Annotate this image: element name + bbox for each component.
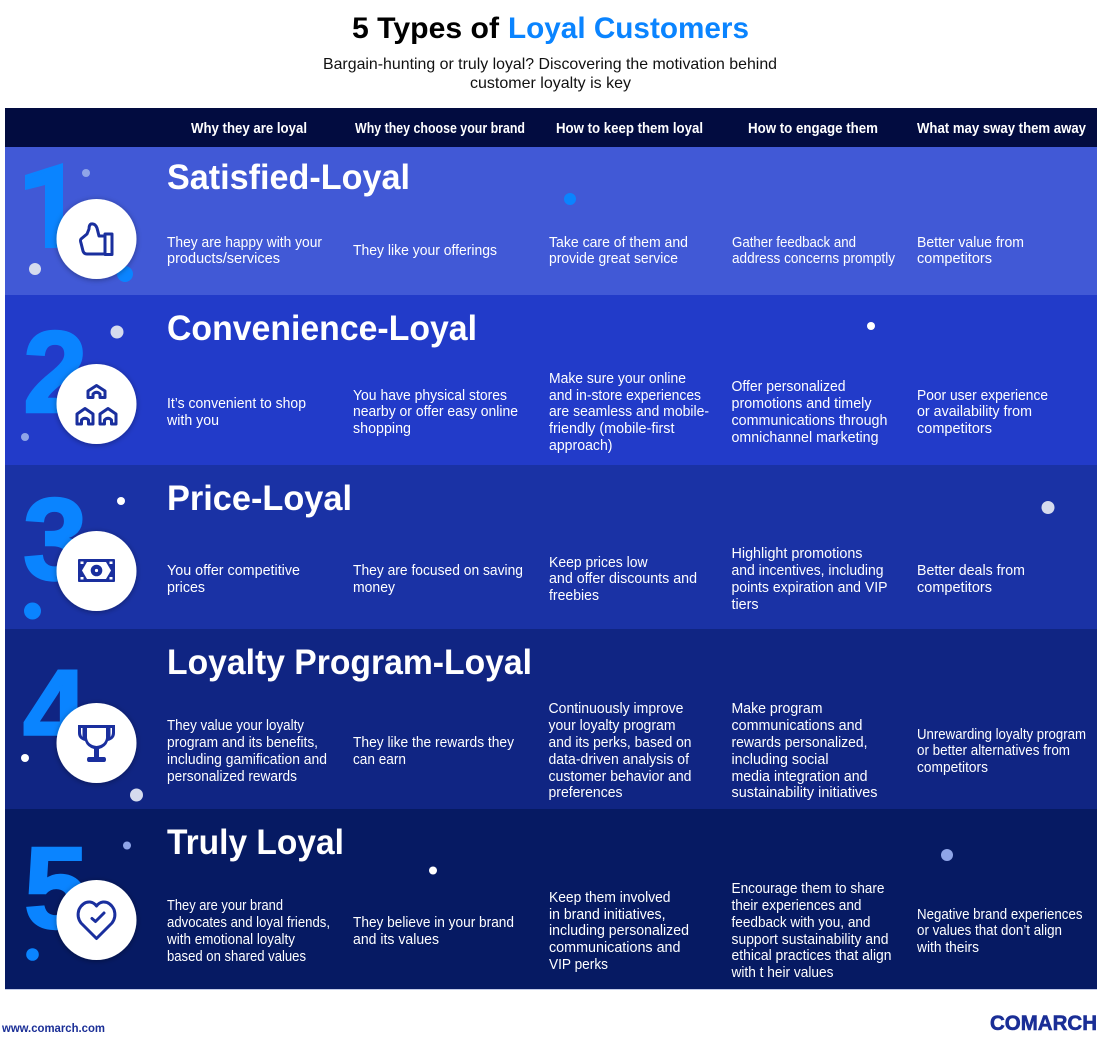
text: why choose: They are focused on saving <box>353 563 523 579</box>
text: why loyal: with emotional loyalty <box>166 932 296 948</box>
panel: Satisfied-Loyal <box>5 143 1097 295</box>
text: keep loyal: VIP perks <box>549 957 608 973</box>
text: engage <box>732 235 896 267</box>
table header: What may sway them away <box>917 121 1086 137</box>
number 1: 1 <box>20 143 85 273</box>
panel: Convenience-Loyal <box>5 295 1097 465</box>
text: engage: Gather feedback and <box>732 235 856 251</box>
logo: Comarch: COMARCH <box>990 1012 1097 1035</box>
text: engage: Make program <box>732 701 822 717</box>
text: why loyal: personalized rewards <box>167 769 297 785</box>
text: why loyal: with you <box>166 413 219 429</box>
text: keep loyal: Continuously improve <box>548 701 684 717</box>
text: sway: Unrewarding loyalty program <box>917 727 1086 743</box>
number 1 <box>25 163 63 248</box>
text: why loyal <box>166 396 306 429</box>
text: keep loyal <box>549 371 709 454</box>
text: engage: media integration and <box>732 769 868 785</box>
text: keep loyal: friendly (mobile-first <box>549 421 674 437</box>
text: why choose <box>353 735 515 768</box>
text: engage <box>732 701 878 801</box>
text: sway: Negative brand experiences <box>917 907 1082 923</box>
text: engage <box>732 379 888 446</box>
text: keep loyal: approach) <box>549 438 612 454</box>
heading: Convenience-Loyal <box>167 308 477 348</box>
text: keep loyal <box>549 890 689 973</box>
footer url: www.comarch.com <box>1 1021 105 1035</box>
text: sway: Poor user experience <box>917 388 1048 404</box>
text: keep loyal: preferences <box>548 785 622 801</box>
subtitle: Bargain-hunting or truly loyal? Discovering the motivation behind <box>323 56 777 73</box>
panel: Loyalty Program-Loyal <box>5 629 1097 809</box>
text: sway <box>917 388 1048 437</box>
text: why loyal: They are happy with your <box>167 235 322 251</box>
text: keep loyal: communications and <box>549 940 680 956</box>
heading: Truly Loyal <box>167 822 344 862</box>
heading: Loyalty Program-Loyal <box>167 642 532 682</box>
text: why choose: and its values <box>353 932 439 948</box>
text: keep loyal: Keep prices low <box>549 555 648 571</box>
text: sway <box>917 563 1025 596</box>
text: keep loyal: Keep them involved <box>549 890 670 906</box>
panel: Truly Loyal <box>5 809 1097 990</box>
heading: Price-Loyal <box>167 478 352 518</box>
table header: Why they choose your brand <box>355 121 525 137</box>
number 2: 2 <box>23 307 88 437</box>
number 4: 4 <box>23 646 88 776</box>
text: why choose: nearby or offer easy online <box>353 404 518 420</box>
text: why loyal <box>167 718 327 785</box>
text: sway <box>917 235 1024 267</box>
text: engage: omnichannel marketing <box>732 430 878 446</box>
text: why choose: They like the rewards they <box>353 735 515 751</box>
heading: Satisfied-Loyal <box>167 157 410 197</box>
text: sway: competitors <box>917 760 988 776</box>
table header <box>5 108 1097 147</box>
text: why choose: They like your offerings <box>353 243 497 259</box>
panel: Price-Loyal <box>5 465 1097 629</box>
title: Loyal Customers <box>508 12 749 45</box>
text: engage: including social <box>732 752 828 768</box>
text: why loyal: products/services <box>167 251 280 267</box>
text: sway: competitors <box>917 421 992 437</box>
text: why choose <box>353 563 523 596</box>
text: sway: competitors <box>917 580 992 596</box>
number 3: 3 <box>23 474 88 604</box>
text: keep loyal: are seamless and mobile- <box>549 404 709 420</box>
text: engage <box>732 546 888 613</box>
text: engage <box>731 881 892 981</box>
table header: Why they are loyal <box>191 121 307 137</box>
text: why loyal: including gamification and <box>167 752 327 768</box>
table header: How to keep them loyal <box>556 121 703 137</box>
text: why choose: You have physical stores <box>353 388 507 404</box>
text: why choose: money <box>353 580 396 596</box>
text: sway: with theirs <box>916 940 979 956</box>
text: engage: ethical practices that align <box>732 948 892 964</box>
text: sway: Better deals from <box>917 563 1025 579</box>
text: engage: and incentives, including <box>732 563 884 579</box>
text: engage: with t heir values <box>731 965 834 981</box>
text: why choose <box>353 915 514 948</box>
text: why loyal <box>166 898 330 965</box>
text: engage: communications and <box>732 718 862 734</box>
number 5: 5 <box>24 823 89 953</box>
text: engage: their experiences and <box>732 898 862 914</box>
text: why choose: They believe in your brand <box>353 915 514 931</box>
text: keep loyal: and its perks, based on <box>548 735 692 751</box>
text: why loyal: program and its benefits, <box>167 735 318 751</box>
text: keep loyal: and offer discounts and <box>549 571 697 587</box>
text: keep loyal: Take care of them and <box>549 235 688 251</box>
text: sway <box>916 907 1082 956</box>
icon: heart check <box>56 880 136 960</box>
table header: How to engage them <box>748 121 878 137</box>
text: sway: or better alternatives from <box>917 743 1070 759</box>
text: keep loyal <box>549 555 697 604</box>
subtitle <box>323 56 777 92</box>
icon: trophy <box>56 703 136 783</box>
text: engage: Encourage them to share <box>732 881 884 897</box>
text: why loyal: based on shared values <box>167 949 306 965</box>
text: engage: communications through <box>732 413 888 429</box>
title <box>352 12 749 45</box>
text: keep loyal: including personalized <box>549 923 689 939</box>
text: keep loyal <box>549 235 688 267</box>
text: why loyal: They are your brand <box>167 898 283 914</box>
text: keep loyal <box>548 701 692 801</box>
text: why loyal: They value your loyalty <box>167 718 305 734</box>
title: 5 Types of <box>352 12 500 45</box>
text: why loyal <box>167 235 322 267</box>
text: keep loyal: in brand initiatives, <box>549 907 666 923</box>
subtitle: customer loyalty is key <box>470 75 631 92</box>
text: sway: or availability from <box>917 404 1032 420</box>
icon: stores <box>56 364 136 444</box>
text: keep loyal: freebies <box>549 588 599 604</box>
text: keep loyal: and in-store experiences <box>549 388 701 404</box>
text: sway <box>917 727 1086 776</box>
text: keep loyal: customer behavior and <box>548 769 692 785</box>
icon: banknote <box>56 531 136 611</box>
text: engage: address concerns promptly <box>732 251 896 267</box>
text: sway: or values that don’t align <box>917 923 1062 939</box>
text: why loyal <box>167 563 300 596</box>
icon: thumbs up <box>56 199 136 279</box>
text: keep loyal: data-driven analysis of <box>548 752 690 768</box>
text: engage: points expiration and VIP <box>732 580 888 596</box>
text: why loyal: You offer competitive <box>167 563 300 579</box>
text: engage: rewards personalized, <box>732 735 868 751</box>
text: why choose <box>353 388 518 437</box>
text: engage: promotions and timely <box>732 396 872 412</box>
text: why loyal: It’s convenient to shop <box>167 396 306 412</box>
text: keep loyal: Make sure your online <box>549 371 686 387</box>
text: engage: sustainability initiatives <box>732 785 878 801</box>
text: engage: tiers <box>732 597 758 613</box>
text: keep loyal: your loyalty program <box>548 718 676 734</box>
text: why choose: can earn <box>353 752 406 768</box>
text: engage: feedback with you, and <box>732 915 870 931</box>
text: sway: competitors <box>917 251 992 267</box>
text: why loyal: advocates and loyal friends, <box>167 915 330 931</box>
text: engage: Highlight promotions <box>732 546 862 562</box>
text: sway: Better value from <box>917 235 1024 251</box>
text: engage: Offer personalized <box>732 379 846 395</box>
text: keep loyal: provide great service <box>549 251 678 267</box>
text: why choose: shopping <box>353 421 411 437</box>
text: why loyal: prices <box>167 580 205 596</box>
text: engage: support sustainability and <box>732 932 888 948</box>
